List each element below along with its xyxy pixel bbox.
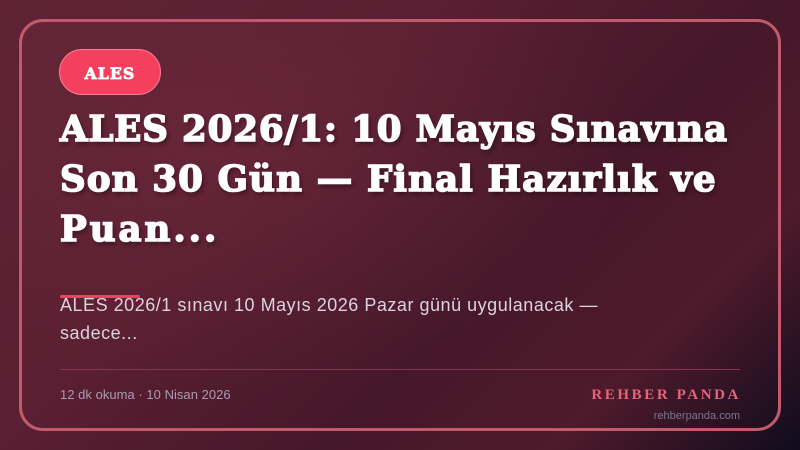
- description: [60, 295, 598, 343]
- title: Son 30 Gün — Final Hazırlık ve: [60, 159, 717, 200]
- title: ALES 2026/1: 10 Mayıs Sınavına: [60, 109, 728, 150]
- description: ALES 2026/1 sınavı 10 Mayıs 2026 Pazar günü uygulanacak —: [60, 295, 598, 315]
- title: [58, 109, 728, 250]
- category badge: ALES: [85, 64, 135, 83]
- accent line: [60, 295, 140, 298]
- brand name: REHBER PANDA: [591, 387, 741, 403]
- title: Puan...: [60, 209, 219, 250]
- description: sadece...: [60, 323, 138, 343]
- footer divider: [60, 369, 740, 370]
- website: rehberpanda.com: [654, 410, 740, 422]
- category badge: [59, 49, 161, 95]
- reading time and date: 12 dk okuma · 10 Nisan 2026: [60, 387, 231, 402]
